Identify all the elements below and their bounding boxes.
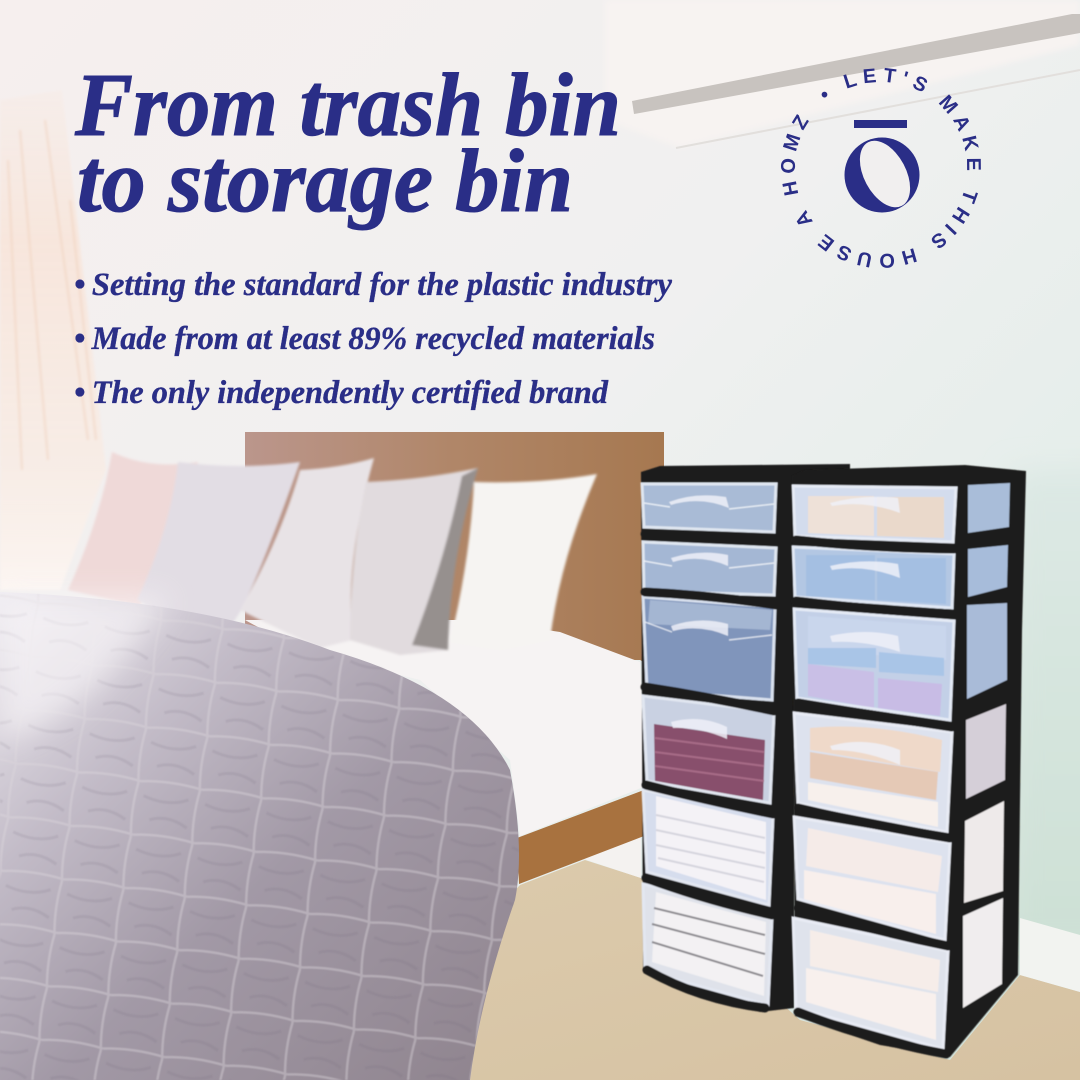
tower body bbox=[641, 464, 850, 1012]
white sheet bbox=[245, 620, 646, 836]
drawer R3 bbox=[794, 609, 954, 720]
logo ring opening bbox=[850, 132, 920, 216]
pillow: white right bbox=[450, 474, 597, 650]
left drawer tower bbox=[641, 464, 850, 1012]
bed frame bbox=[517, 790, 644, 884]
drawer L2 bbox=[643, 542, 776, 595]
carpet floor bbox=[330, 860, 1080, 1080]
logo badge bbox=[781, 68, 981, 268]
side panels bbox=[963, 483, 1010, 1008]
title: to storage bin bbox=[77, 132, 573, 231]
drawer R2 bbox=[793, 547, 954, 608]
left tower rails bbox=[645, 534, 776, 1008]
wooden headboard bbox=[245, 432, 664, 672]
pillow: pink bbox=[68, 452, 198, 606]
pillow: grey fold bbox=[350, 468, 478, 655]
logo ring bbox=[844, 138, 920, 212]
bullet 2: • Made from at least 89% recycled materials bbox=[74, 321, 655, 357]
curtain bbox=[0, 90, 106, 590]
drawer R6 bbox=[793, 918, 948, 1049]
drawer L3 bbox=[643, 597, 775, 700]
skirting boards bbox=[584, 836, 1080, 992]
drawer L5 bbox=[643, 790, 773, 905]
pillow: grey edge bbox=[412, 468, 478, 650]
bullet 1: • Setting the standard for the plastic industry bbox=[74, 267, 672, 303]
right wall tint bbox=[1012, 470, 1080, 950]
title bbox=[74, 56, 621, 231]
tower body bbox=[792, 465, 1026, 1057]
bullet 3: • The only independently certified brand bbox=[74, 375, 608, 411]
right drawer tower bbox=[792, 465, 1026, 1057]
quilted bedspread bbox=[0, 592, 519, 1080]
drawer R5 bbox=[794, 817, 950, 940]
pillow: grey white bbox=[137, 462, 300, 640]
drawer L4 bbox=[643, 696, 774, 803]
pillow: white middle bbox=[240, 458, 374, 648]
drawer R1 bbox=[793, 486, 956, 542]
ceiling and beam bbox=[605, 0, 1080, 148]
drawer L1 bbox=[642, 484, 776, 532]
right tower rails bbox=[796, 540, 954, 1054]
logo bar bbox=[854, 120, 907, 128]
title: From trash bin bbox=[74, 56, 621, 155]
pillows bbox=[68, 452, 597, 655]
bullet list bbox=[74, 267, 672, 411]
circular slogan: • LET'S MAKE THIS HOUSE A HOMZ bbox=[781, 68, 981, 268]
drawer L6 bbox=[643, 884, 772, 1005]
drawer R4 bbox=[794, 713, 952, 832]
